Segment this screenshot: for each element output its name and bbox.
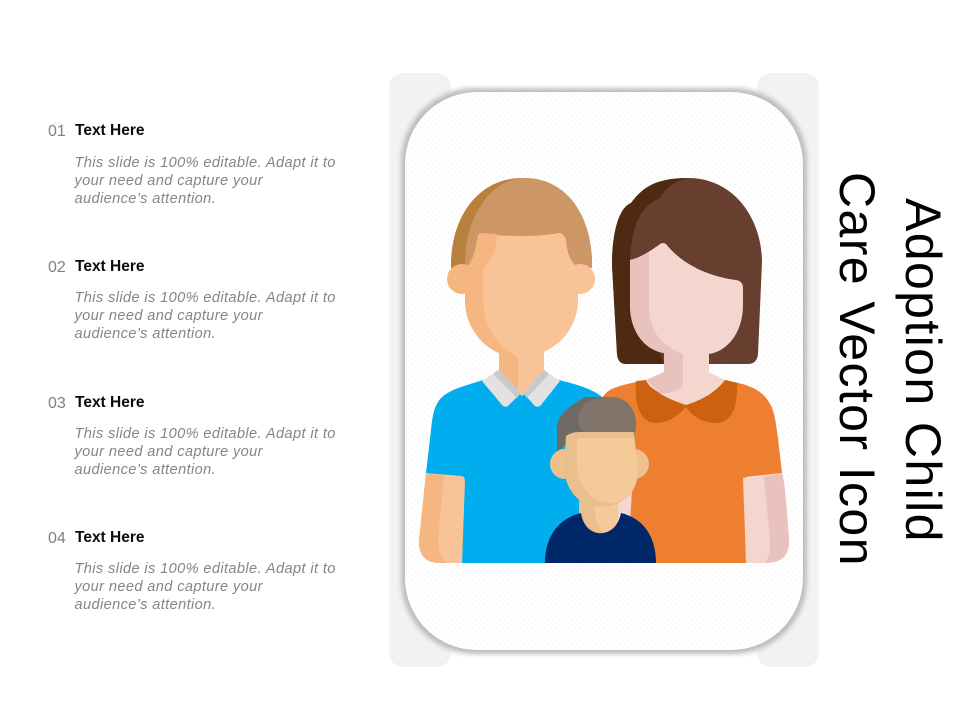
left side tab [389, 73, 451, 667]
number 01: 01 [48, 123, 66, 140]
man [419, 178, 610, 563]
title rotated [829, 172, 951, 567]
description 01 [74, 155, 336, 207]
icon: family [419, 178, 789, 563]
description 03: This slide is 100% editable. Adapt it to [74, 426, 336, 442]
description 03: audience’s attention. [74, 462, 216, 478]
list item 04 [48, 529, 336, 613]
number 04: 04 [48, 530, 66, 547]
list item 02 [48, 258, 336, 342]
title rotated: Care Vector Icon [829, 172, 885, 567]
heading 01: Text Here [75, 122, 144, 139]
description 02: audience’s attention. [74, 326, 216, 342]
heading 02: Text Here [75, 258, 144, 275]
list item 01 [48, 122, 336, 207]
dotted white card [405, 92, 803, 650]
boy [545, 397, 656, 563]
description 02: your need and capture your [74, 308, 263, 324]
description 04: your need and capture your [74, 579, 263, 595]
description 04: This slide is 100% editable. Adapt it to [74, 561, 336, 577]
number ring accent [49, 123, 65, 127]
description 01: This slide is 100% editable. Adapt it to [74, 155, 336, 171]
description 03 [74, 426, 336, 478]
description 01: audience’s attention. [74, 191, 216, 207]
woman [600, 178, 789, 563]
description 04: audience’s attention. [74, 597, 216, 613]
description 04 [74, 561, 336, 613]
heading 03: Text Here [75, 394, 144, 411]
description 02: This slide is 100% editable. Adapt it to [74, 290, 336, 306]
number 03: 03 [48, 395, 66, 412]
title rotated: Adoption Child [895, 198, 951, 543]
description 01: your need and capture your [74, 173, 263, 189]
description 02 [74, 290, 336, 342]
number 02: 02 [48, 259, 66, 276]
description 03: your need and capture your [74, 444, 263, 460]
card shadow [401, 88, 807, 654]
list item 03 [48, 394, 336, 478]
heading 04: Text Here [75, 529, 144, 546]
right side tab [757, 73, 819, 667]
